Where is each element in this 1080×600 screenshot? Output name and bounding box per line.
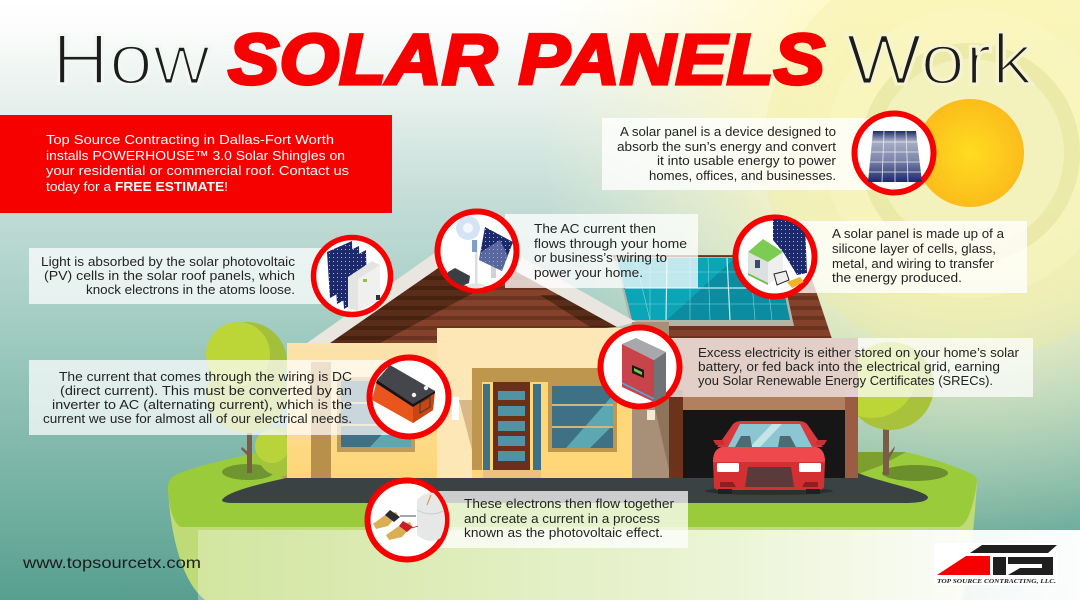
title: How: How <box>52 21 211 100</box>
panel: light absorbed <box>29 248 345 304</box>
solar array <box>615 257 794 326</box>
panel: light absorbed: Light is absorbed by the solar photovoltaic <box>41 254 296 269</box>
icon: panels and inverter circle <box>314 238 390 314</box>
panel: electrons <box>420 491 688 548</box>
left window <box>337 377 415 452</box>
roof fascia <box>307 228 636 343</box>
panel: made up of: silicone layer of cells, glass, <box>832 241 996 256</box>
house <box>287 228 858 478</box>
left wing <box>287 343 437 478</box>
panel: excess electricity: battery, or fed back into the electrical grid, earning <box>698 359 1000 374</box>
panel: made up of: A solar panel is made up of a <box>832 226 1005 241</box>
panel: excess electricity <box>670 338 1033 397</box>
tree: right <box>858 342 948 481</box>
side lights <box>483 384 490 470</box>
panel: AC current: flows through your home <box>534 236 687 251</box>
logo <box>934 543 1057 585</box>
title <box>52 21 1033 100</box>
tree: left <box>206 322 305 480</box>
bottom strip overlay <box>198 530 1080 600</box>
panel: DC current: inverter to AC (alternating current), which is the <box>52 397 352 412</box>
icon: solar panel circle <box>854 114 934 192</box>
panel: AC current: power your home. <box>534 265 643 280</box>
panel: made up of: the energy produced. <box>832 270 962 285</box>
panel: solar panel definition: homes, offices, and businesses. <box>649 168 836 183</box>
panel: DC current: The current that comes through the wiring is DC <box>59 369 352 384</box>
panel: DC current: (direct current). This must be converted by an <box>60 383 352 398</box>
panel: AC current: The AC current then <box>534 221 656 236</box>
panel: made up of <box>795 221 1027 293</box>
panel: light absorbed: (PV) cells in the solar roof panels, which <box>44 268 295 283</box>
right window <box>548 382 617 452</box>
panel: light absorbed: knock electrons in the atoms loose. <box>86 282 295 297</box>
icon: clamps circle <box>368 480 446 560</box>
panel: AC current <box>505 214 698 288</box>
panel: DC current <box>29 360 395 435</box>
front roof <box>330 246 617 343</box>
panel: DC current: current we use for almost all of our electrical needs. <box>43 411 352 426</box>
back roof <box>612 255 832 339</box>
panel: made up of: metal, and wiring to transfer <box>832 256 995 271</box>
road <box>222 473 928 503</box>
icon: battery circle <box>370 358 448 436</box>
panel: solar panel definition: it into usable energy to power <box>657 153 837 168</box>
front door <box>493 382 530 470</box>
logo: TOP SOURCE CONTRACTING, LLC. <box>937 578 1056 585</box>
panel: solar panel definition: A solar panel is a device designed to <box>620 124 836 139</box>
car <box>705 421 833 495</box>
panel: electrons: known as the photovoltaic effect. <box>464 525 663 540</box>
panel: red intro callout: today for a FREE ESTIMATE ! <box>46 179 228 194</box>
panel: electrons: These electrons then flow together <box>464 496 675 511</box>
panel: electrons: and create a current in a process <box>464 511 661 526</box>
title: Work: Work <box>846 21 1033 100</box>
garage wing <box>632 322 669 478</box>
panel: red intro callout: your residential or commercial roof. Contact us <box>46 163 350 178</box>
centre block <box>437 328 632 478</box>
title: Solar Panels: SOLAR PANELS <box>228 21 825 100</box>
panel: solar panel definition: absorb the sun’s energy and convert <box>617 139 836 154</box>
icon: battery box and panels circle <box>736 212 814 296</box>
panel: solar panel definition <box>602 118 875 190</box>
panel: excess electricity: Excess electricity is either stored on your home’s solar <box>698 345 1020 360</box>
panel: excess electricity: you Solar Renewable Energy Certificates (SRECs). <box>698 373 993 388</box>
panel: red intro callout <box>0 115 392 213</box>
icon: fan and panel circle <box>438 212 516 290</box>
panel: AC current: or business’s wiring to <box>534 250 667 265</box>
panel: red intro callout: Top Source Contracting in Dallas-Fort Worth <box>46 132 334 147</box>
icon: inverter circle <box>600 328 680 406</box>
sun <box>916 99 1024 207</box>
website url: www.topsourcetx.com <box>22 555 201 572</box>
panel: red intro callout: installs POWERHOUSE™ 3.0 Solar Shingles on <box>46 148 345 163</box>
island <box>168 452 977 600</box>
